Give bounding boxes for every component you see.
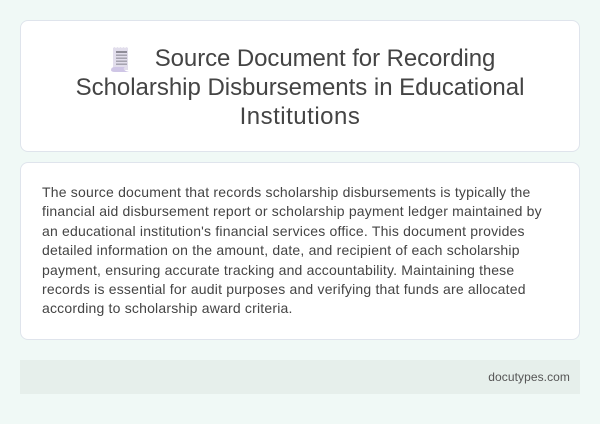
- footer text: docutypes.com: [488, 370, 570, 384]
- panel: description card: [20, 162, 580, 340]
- heading: title: Scholarship Disbursements in Educational: [76, 74, 524, 101]
- heading: title: [76, 45, 524, 130]
- panel: title card: [20, 20, 580, 152]
- text block: description: financial aid disbursement report or scholarship payment ledger maintained by: [42, 203, 542, 219]
- text block: description: payment, ensuring accurate tracking and accountability. Maintaining these: [42, 262, 514, 278]
- footer bar: [20, 360, 580, 394]
- text block: description: The source document that records scholarship disbursements is typically the: [42, 184, 531, 200]
- icon: document scroll: [111, 47, 129, 72]
- text block: description: according to scholarship award criteria.: [42, 300, 293, 316]
- heading: title: Institutions: [240, 103, 360, 130]
- text block: description: records is essential for audit purposes and verifying that funds are allocated: [42, 281, 526, 297]
- heading: title: Source Document for Recording: [155, 45, 495, 72]
- text block: description: [42, 184, 542, 316]
- text block: description: an educational institution's financial services office. This document provides: [42, 223, 525, 239]
- text block: description: detailed information on the amount, date, and recipient of each scholarship: [42, 242, 520, 258]
